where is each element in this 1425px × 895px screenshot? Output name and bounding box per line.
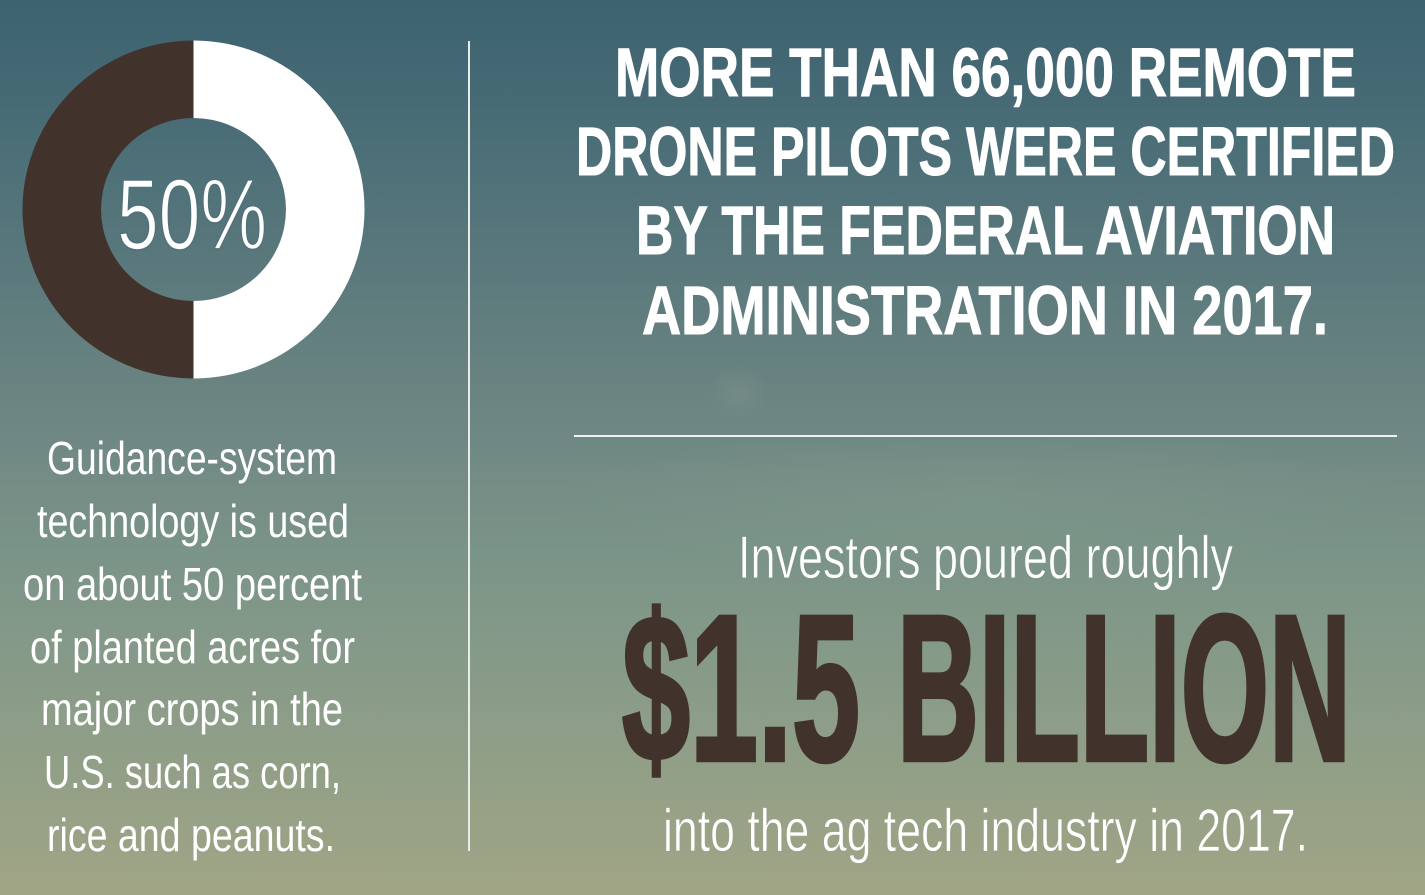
horizontal divider	[574, 435, 1397, 437]
text block: guidance-system description: technology is used	[37, 495, 349, 547]
text block: guidance-system description	[23, 432, 362, 861]
callout: investment figure	[622, 524, 1351, 864]
text block: guidance-system description: rice and peanuts.	[47, 809, 335, 861]
donut chart: 50 percent	[22, 40, 364, 378]
donut label: 50%	[117, 159, 267, 271]
text block: guidance-system description: of planted acres for	[30, 621, 355, 673]
text block: guidance-system description: U.S. such as corn,	[44, 746, 341, 798]
donut segment: brown half	[22, 40, 193, 378]
callout big number: $1.5	[622, 573, 860, 805]
heading: remote drone pilots	[576, 34, 1395, 349]
text block: guidance-system description: on about 50 percent	[23, 558, 362, 610]
donut segment: white half	[194, 40, 364, 378]
vertical divider	[468, 41, 470, 851]
callout lead-in: Investors poured roughly	[738, 524, 1233, 591]
callout big number	[622, 573, 1351, 805]
text block: guidance-system description: major crops in the	[41, 683, 343, 735]
text block: guidance-system description: Guidance-system	[47, 432, 337, 484]
